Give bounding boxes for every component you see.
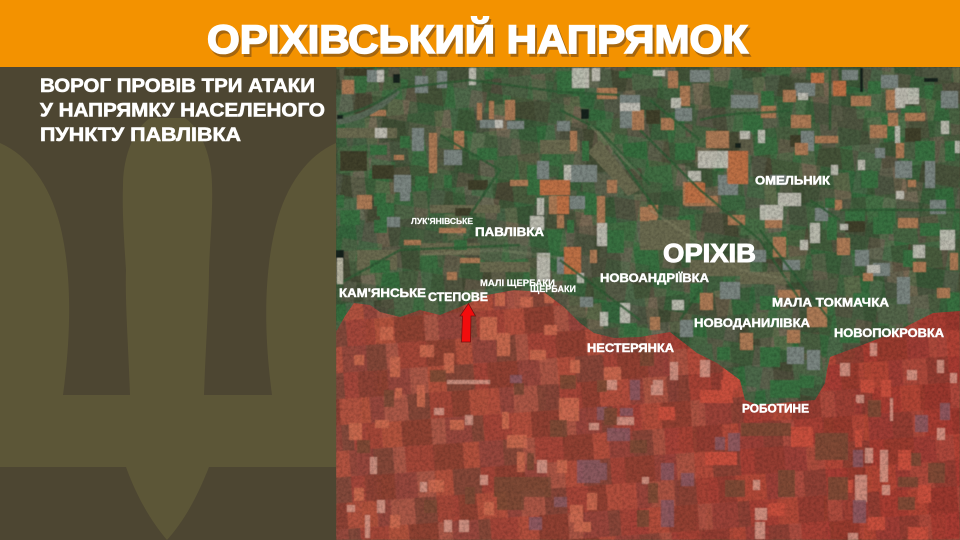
icon: trident emblem <box>0 118 336 540</box>
label: Оріхів: ОРІХІВ <box>663 238 756 268</box>
title: ОРІХІВСЬКИЙ НАПРЯМОК <box>207 16 749 62</box>
arrow: enemy attack direction <box>460 304 476 342</box>
text block: situation summary: ПУНКТУ ПАВЛІВКА <box>40 125 241 146</box>
occupied territory: red overlay <box>336 290 960 540</box>
text block: situation summary: У НАПРЯМКУ НАСЕЛЕНОГО <box>40 100 325 122</box>
label: Роботине: РОБОТИНЕ <box>742 404 809 416</box>
label: Новоандріївка: НОВОАНДРІЇВКА <box>600 270 709 285</box>
label: Степове: СТЕПОВЕ <box>428 290 488 304</box>
text block: situation summary <box>40 76 325 146</box>
label: Лук'янівське: ЛУК'ЯНІВСЬКЕ <box>411 217 474 226</box>
label: Новоданилівка: НОВОДАНИЛІВКА <box>694 316 810 330</box>
label: Малі Щербаки: МАЛІ ЩЕРБАКИ <box>480 278 555 288</box>
label: Омельник: ОМЕЛЬНИК <box>755 174 831 188</box>
label: Нестерянка: НЕСТЕРЯНКА <box>587 341 674 355</box>
label: Щербаки: ЩЕРБАКИ <box>530 284 576 294</box>
label: Новопокровка: НОВОПОКРОВКА <box>834 326 944 340</box>
map: satellite field patchwork <box>336 67 960 540</box>
title banner <box>0 0 960 67</box>
title shadow: ОРІХІВСЬКИЙ НАПРЯМОК <box>209 19 751 65</box>
label: Мала Токмачка: МАЛА ТОКМАЧКА <box>772 296 889 310</box>
label: Кам'янське: КАМ'ЯНСЬКЕ <box>339 286 426 300</box>
ponds <box>336 68 938 260</box>
map labels: settlements <box>339 174 944 416</box>
map grain texture <box>336 67 960 540</box>
map base: green farmland <box>336 67 960 540</box>
left panel background <box>0 67 336 540</box>
label: Павлівка: ПАВЛІВКА <box>475 225 544 239</box>
rivers and tree belts <box>337 90 398 122</box>
text block: situation summary: ВОРОГ ПРОВІВ ТРИ АТАКИ <box>40 76 315 97</box>
